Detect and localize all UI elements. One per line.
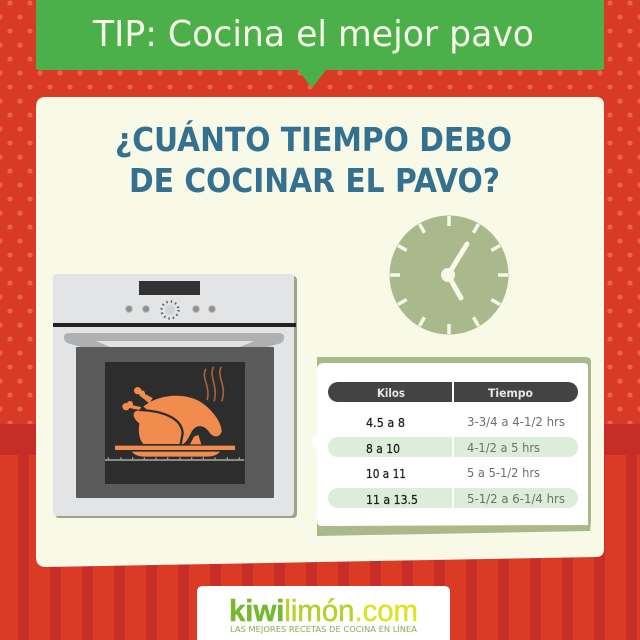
- turkey body: [122, 387, 222, 444]
- table right column: tiempo: 5 a 5-1/2 hrs: [467, 466, 540, 480]
- turkey on tray: [105, 367, 244, 461]
- logo wordmark: kiwilimón.com: [229, 593, 418, 628]
- icon: clock: [390, 216, 508, 334]
- logo panel: [197, 586, 450, 640]
- heading: DE COCINAR EL PAVO?: [129, 161, 500, 200]
- main cream card: [36, 97, 604, 567]
- heading: ¿CUÁNTO TIEMPO DEBO: [115, 119, 512, 159]
- green title banner: [36, 0, 604, 88]
- table left column: kilos: 11 a 13.5: [366, 493, 418, 507]
- table right column: tiempo: 4-1/2 a 5 hrs: [467, 441, 540, 455]
- table header: Tiempo: [488, 386, 533, 400]
- table left column: kilos: 10 a 11: [366, 467, 406, 481]
- table header: [328, 382, 578, 402]
- table left column: kilos: [366, 416, 418, 507]
- table right column: tiempo: 5-1/2 a 6-1/4 hrs: [467, 492, 565, 506]
- table card: [311, 357, 591, 536]
- oven door window: [64, 333, 284, 498]
- table right column: tiempo: [467, 415, 565, 506]
- logo tagline: LAS MEJORES RECETAS DE COCINA EN LÍNEA: [230, 623, 418, 634]
- oven rack: [105, 457, 244, 461]
- table header: Kilos: [377, 386, 405, 400]
- banner title text: TIP: Cocina el mejor pavo: [92, 14, 534, 55]
- table row stripes: [328, 437, 578, 508]
- table right column: tiempo: 3-3/4 a 4-1/2 hrs: [467, 415, 565, 429]
- heading: [115, 119, 512, 200]
- oven control panel: [53, 281, 296, 327]
- steam: [204, 367, 223, 401]
- illustration: oven with turkey: [53, 274, 297, 518]
- table left column: kilos: 4.5 a 8: [366, 416, 405, 430]
- table left column: kilos: 8 a 10: [366, 442, 400, 456]
